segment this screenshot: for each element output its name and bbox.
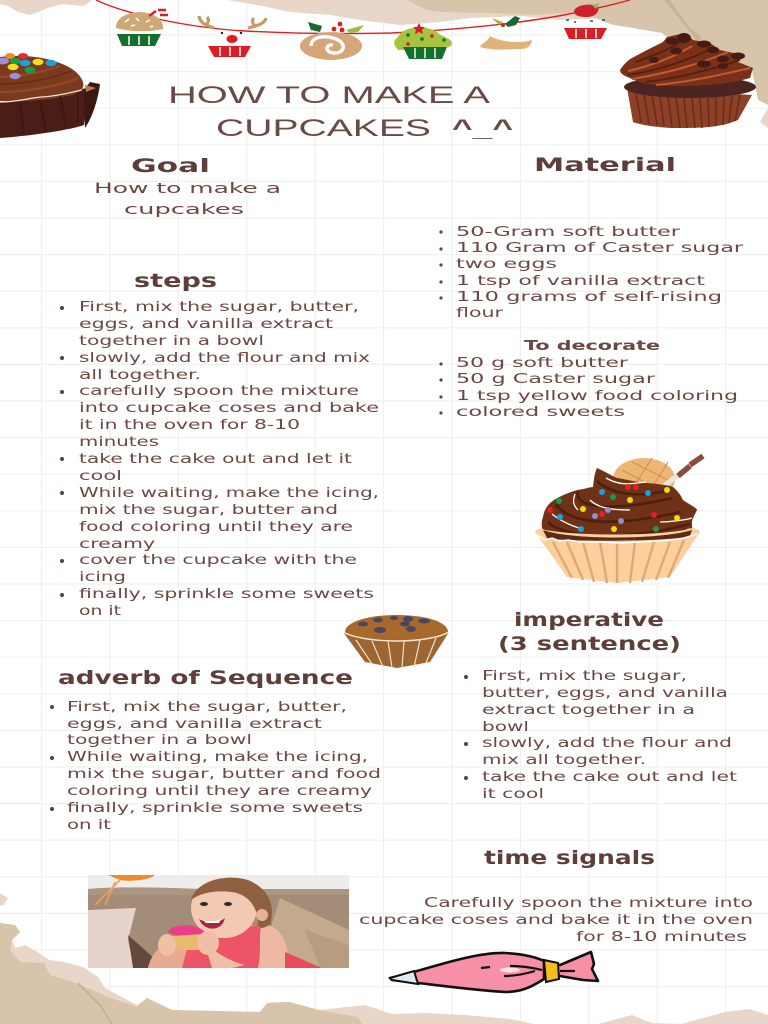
steps list: creamy [79, 537, 155, 552]
garland: reindeer cupcake [199, 16, 266, 57]
material list: two eggs [456, 257, 557, 272]
decorate list: 50 g soft butter [456, 356, 629, 371]
steps list: mix the sugar, butter and [79, 503, 338, 518]
heading: Goal: Goal [131, 155, 210, 177]
material list [439, 225, 744, 321]
imperative list: mix all together. [482, 753, 646, 768]
title: ^_^ [452, 115, 513, 142]
imperative list: First, mix the sugar, [482, 669, 687, 684]
title: HOW TO MAKE A [168, 82, 490, 109]
heading: time signals: time signals [484, 847, 655, 869]
imperative list: it cool [482, 787, 544, 802]
goal text: cupcakes [124, 202, 244, 218]
heading: Material: Material [534, 154, 676, 176]
adverb list: First, mix the sugar, butter, [67, 700, 347, 715]
adverb list: mix the sugar, butter and food [67, 767, 381, 782]
steps list: cover the cupcake with the [79, 553, 357, 568]
adverb list: eggs, and vanilla extract [67, 717, 322, 732]
cupcake: left chocolate with candies [0, 53, 100, 138]
material list: 110 grams of self-rising [456, 290, 722, 305]
steps list: eggs, and vanilla extract [79, 317, 333, 332]
steps list: on it [79, 604, 121, 619]
steps list: slowly, add the flour and mix [79, 351, 370, 366]
garland: strawberry cupcake [564, 3, 607, 39]
heading: steps: steps [134, 270, 217, 292]
time signals text: Carefully spoon the mixture into [424, 896, 753, 911]
steps list: carefully spoon the mixture [79, 384, 359, 399]
cupcake: right chocolate with curls [620, 33, 756, 128]
material list: 50-Gram soft butter [456, 225, 681, 240]
imperative list [464, 669, 737, 802]
steps list [60, 300, 379, 619]
decorate list: colored sweets [456, 405, 625, 420]
steps list: all together. [79, 368, 201, 383]
title: CUPCAKES [216, 115, 431, 142]
imperative list: take the cake out and let [482, 770, 737, 785]
adverb list [50, 700, 381, 833]
decorate list [439, 356, 738, 420]
garland: pudding [480, 16, 532, 50]
photo: child eating a cupcake [88, 875, 349, 968]
garland: candy cupcake [116, 10, 168, 46]
steps list: While waiting, make the icing, [79, 486, 379, 501]
steps list: First, mix the sugar, butter, [79, 300, 359, 315]
garland: green cupcake [394, 23, 452, 59]
time signals text: cupcake coses and bake it in the oven [359, 913, 753, 928]
icon: piping bag [390, 952, 598, 992]
heading: adverb of Sequence: adverb of Sequence [58, 667, 353, 689]
torn paper: bottom edge [0, 893, 768, 1024]
goal text [94, 181, 281, 218]
heading: imperative [498, 609, 681, 655]
torn paper: top edge [0, 0, 768, 128]
imperative list: butter, eggs, and vanilla [482, 686, 728, 701]
cupcake: muffin with blueberries [343, 615, 449, 668]
adverb list: While waiting, make the icing, [67, 750, 368, 765]
garland: swiss roll [300, 22, 364, 60]
adverb list: coloring until they are creamy [67, 784, 372, 799]
material list: flour [456, 306, 504, 321]
heading: imperative: imperative [514, 609, 664, 631]
steps list: finally, sprinkle some sweets [79, 587, 374, 602]
imperative list: extract together in a [482, 703, 695, 718]
heading: To decorate: To decorate [524, 339, 660, 354]
material list: 110 Gram of Caster sugar [456, 241, 744, 256]
adverb list: finally, sprinkle some sweets [67, 801, 363, 816]
imperative list: slowly, add the flour and [482, 736, 732, 751]
steps list: into cupcake coses and bake [79, 401, 379, 416]
time signals text [359, 896, 753, 945]
material list: 1 tsp of vanilla extract [456, 274, 705, 289]
steps list: minutes [79, 435, 159, 450]
heading: imperative: (3 sentence) [498, 633, 681, 655]
cupcake: large with waffle and sprinkles [535, 456, 703, 583]
steps list: food coloring until they are [79, 520, 353, 535]
decorate list: 50 g Caster sugar [456, 372, 656, 387]
adverb list: on it [67, 818, 111, 833]
adverb list: together in a bowl [67, 733, 252, 748]
title [168, 82, 513, 142]
imperative list: bowl [482, 720, 529, 735]
steps list: icing [79, 570, 126, 585]
steps list: take the cake out and let it [79, 452, 352, 467]
decorate list: 1 tsp yellow food coloring [456, 389, 738, 404]
steps list: cool [79, 469, 122, 484]
goal text: How to make a [94, 181, 281, 197]
time signals text: for 8-10 minutes [576, 930, 747, 945]
steps list: together in a bowl [79, 334, 264, 349]
steps list: it in the oven for 8-10 [79, 418, 300, 433]
garland string [96, 0, 630, 34]
